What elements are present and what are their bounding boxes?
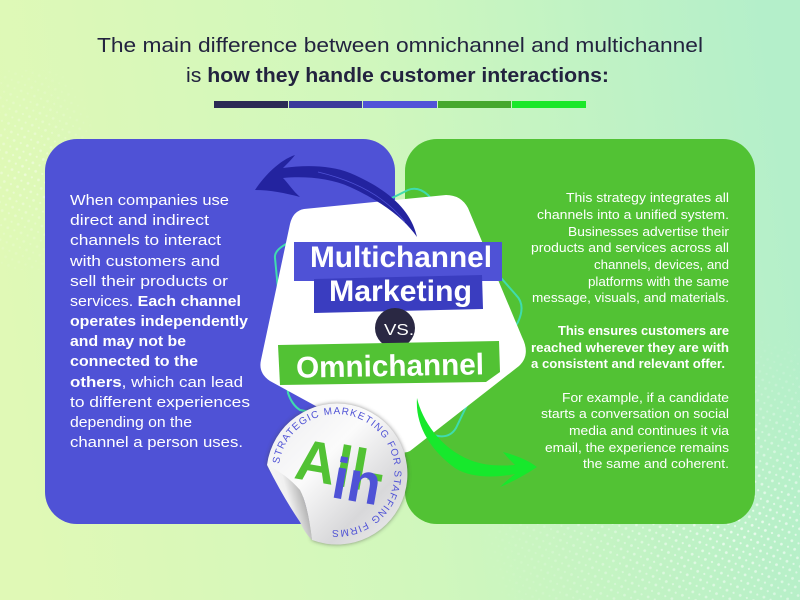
multichannel description: with customers and: [69, 253, 220, 270]
multichannel description: When companies use: [70, 192, 229, 209]
title: [97, 35, 703, 87]
multichannel description: connected to the: [70, 353, 198, 370]
omnichannel description: channels into a unified system.: [537, 208, 729, 222]
omnichannel description: media and continues it via: [569, 424, 729, 438]
omnichannel description: Businesses advertise their: [568, 225, 729, 239]
multichannel description: depending on the: [70, 414, 192, 431]
sticker badge: [264, 400, 410, 548]
omnichannel description: starts a conversation on social: [541, 407, 729, 421]
omnichannel description: For example, if a candidate: [562, 391, 729, 405]
omnichannel description: the same and coherent.: [583, 457, 729, 471]
multichannel description: services. Each channel: [70, 293, 241, 310]
vs. circle: [375, 308, 415, 348]
omnichannel description: This ensures customers are: [558, 324, 729, 338]
banner: Omnichannel: Omnichannel: [296, 348, 484, 385]
multichannel description: others , which can lead: [70, 374, 243, 391]
logo: All green: All-: [291, 427, 391, 506]
panel: multichannel: [45, 139, 395, 524]
multichannel description: channels to interact: [70, 232, 222, 249]
multichannel description: operates independently: [70, 313, 249, 330]
arrow: to multichannel panel: [255, 155, 417, 237]
omnichannel description: a consistent and relevant offer.: [531, 357, 725, 371]
omnichannel description: platforms with the same: [588, 275, 729, 289]
banner: Marketing: Marketing: [329, 275, 472, 308]
centre white badge: [260, 195, 526, 452]
sticker ring text: STRATEGIC MARKETING FOR STAFFING FIRMS: [272, 407, 402, 537]
vs. circle: VS.: [384, 322, 414, 339]
panel: omnichannel: [405, 139, 755, 524]
multichannel description: direct and indirect: [70, 212, 210, 229]
title: is how they handle customer interactions:: [186, 65, 609, 87]
multichannel description: and may not be: [70, 333, 186, 350]
omnichannel description: reached wherever they are with: [531, 341, 729, 355]
omnichannel description: email, the experience remains: [545, 441, 729, 455]
multichannel description: sell their products or: [70, 273, 228, 290]
teal outline behind centre badge: [275, 189, 522, 436]
title: The main difference between omnichannel and multichannel: [97, 35, 703, 57]
omnichannel description: channels, devices, and: [594, 258, 729, 272]
colour bar divider: [214, 101, 586, 108]
multichannel description: to different experiences: [70, 394, 250, 411]
arrow: to omnichannel panel: [417, 398, 537, 487]
multichannel description: channel a person uses.: [70, 434, 243, 451]
omnichannel description: [531, 191, 729, 471]
peeled corner: [267, 465, 312, 540]
multichannel description: [69, 192, 250, 451]
logo: in blue: in: [328, 446, 386, 518]
omnichannel description: This strategy integrates all: [566, 191, 729, 205]
banner: Multichannel: Multichannel: [310, 241, 492, 274]
omnichannel description: message, visuals, and materials.: [532, 291, 729, 305]
omnichannel description: products and services across all: [531, 241, 729, 255]
